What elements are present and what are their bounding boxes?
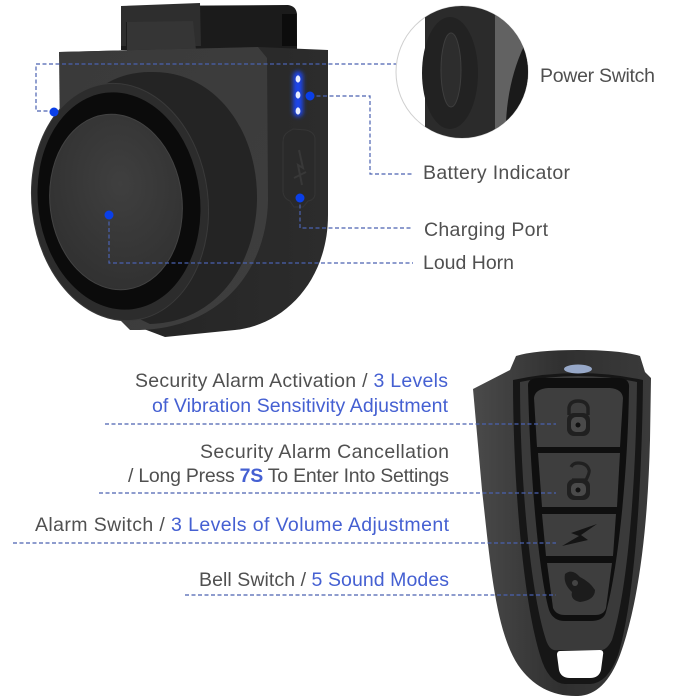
dot: loud horn bbox=[104, 210, 114, 220]
fob label 2 bbox=[128, 441, 449, 487]
fob button recess bbox=[528, 378, 629, 621]
label: power switch: Power Switch bbox=[540, 65, 655, 87]
fob shell bbox=[473, 350, 651, 696]
fob label 1: of Vibration Sensitivity Adjustment bbox=[152, 395, 449, 417]
leader line: loud horn bbox=[109, 215, 413, 263]
fob leader line 4 bbox=[185, 594, 556, 596]
device body bbox=[59, 47, 328, 337]
fob leader line 2 bbox=[99, 492, 556, 494]
mounting clip bbox=[121, 3, 297, 52]
key ring hole bbox=[557, 650, 603, 678]
fob label 4: Bell Switch / 5 Sound Modes bbox=[199, 569, 449, 591]
button 4: bell bbox=[547, 563, 612, 615]
fob label 3: Alarm Switch / 3 Levels of Volume Adjustment bbox=[35, 514, 450, 536]
fob inner frame bbox=[513, 373, 643, 684]
label: loud horn: Loud Horn bbox=[423, 252, 514, 274]
battery LEDs bbox=[293, 71, 303, 117]
dot: charging port bbox=[296, 194, 304, 202]
label: battery indicator: Battery Indicator bbox=[423, 162, 570, 184]
USB port cover bbox=[283, 129, 315, 207]
fob label 1 bbox=[135, 370, 449, 417]
fob leader line 1 bbox=[105, 423, 556, 425]
label: charging port: Charging Port bbox=[424, 219, 549, 241]
fob leader line 3 bbox=[13, 542, 556, 544]
button 3: lightning bbox=[542, 514, 616, 556]
key fob remote bbox=[473, 350, 651, 696]
fob label 2: Security Alarm Cancellation bbox=[200, 441, 449, 463]
horn rear cylinder bbox=[90, 72, 257, 324]
button 1: lock bbox=[534, 388, 623, 447]
fob face plate bbox=[520, 376, 637, 650]
leader line: battery indicator bbox=[310, 96, 413, 174]
leader line: power switch bbox=[36, 64, 396, 111]
horn inner recess bbox=[25, 83, 213, 319]
button 2: unlock bbox=[538, 453, 620, 507]
horn cap bbox=[40, 107, 192, 297]
power switch inset bbox=[396, 6, 528, 138]
dot: power switch bbox=[50, 108, 58, 116]
horn outer ring bbox=[18, 73, 222, 331]
leader line: charging port bbox=[300, 198, 413, 228]
dot: battery indicator bbox=[306, 92, 314, 100]
fob label 2: / Long Press 7S To Enter Into Settings bbox=[128, 465, 449, 487]
indicator LED bbox=[564, 364, 592, 374]
fob label 1: Security Alarm Activation / 3 Levels bbox=[135, 370, 448, 392]
front face bbox=[59, 47, 268, 330]
alarm device bbox=[18, 3, 328, 337]
